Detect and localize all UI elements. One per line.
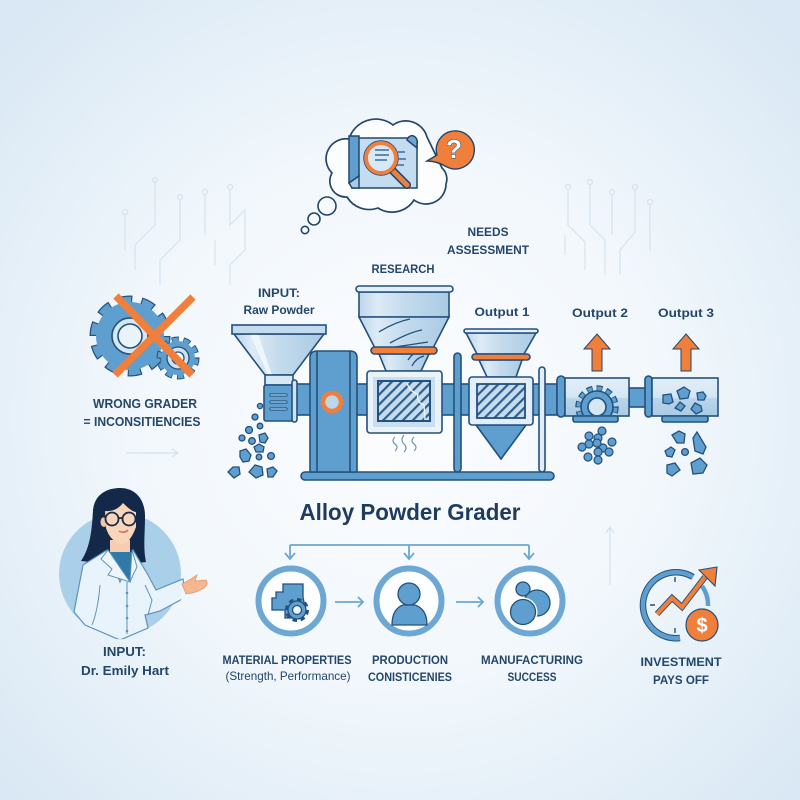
thought cloud with map and question xyxy=(301,119,474,234)
label: needs assessment: NEEDS xyxy=(468,225,508,239)
neck xyxy=(110,540,130,564)
label: material properties: (Strength, Performance) xyxy=(226,669,351,683)
label: manufacturing success: MANUFACTURING xyxy=(481,653,583,667)
pipe to final box xyxy=(629,388,646,407)
research hopper xyxy=(356,286,453,371)
decorative circuit traces right xyxy=(565,180,652,275)
icon: question bubble xyxy=(427,131,474,169)
icon: person xyxy=(392,583,427,625)
scientist portrait xyxy=(59,488,207,640)
buttons xyxy=(126,592,128,632)
label: wrong grader: = INCONSITIENCIES xyxy=(84,415,200,429)
face xyxy=(105,503,136,544)
post xyxy=(454,353,461,472)
arrow step 2 to 3 xyxy=(456,597,483,607)
orange ring xyxy=(323,393,341,411)
label: wrong grader xyxy=(84,397,200,429)
thought bubbles xyxy=(301,197,336,234)
hair xyxy=(81,488,146,565)
light post xyxy=(539,367,545,472)
label: output 1: Output 1 xyxy=(474,305,530,319)
label: investment pays off: PAYS OFF xyxy=(653,673,709,687)
small gear xyxy=(161,341,195,375)
mouth xyxy=(119,530,128,532)
output 1 chamber xyxy=(469,377,533,425)
growth arrow xyxy=(657,577,705,614)
investment icon xyxy=(643,567,718,641)
label: output 3: Output 3 xyxy=(658,306,714,320)
label: dr emily hart: Dr. Emily Hart xyxy=(81,664,170,678)
label: dr emily hart xyxy=(81,645,170,678)
output 3 collar xyxy=(645,376,652,417)
label: production consistencies: PRODUCTION xyxy=(372,653,448,667)
clock dial xyxy=(643,572,693,638)
label: wrong grader: WRONG GRADER xyxy=(93,397,197,411)
label: material properties: MATERIAL PROPERTIES xyxy=(222,653,352,667)
step 2 production xyxy=(376,568,442,634)
label: manufacturing success xyxy=(481,653,583,684)
coat xyxy=(74,550,186,640)
gear xyxy=(579,389,615,425)
raw powder particles xyxy=(228,403,277,478)
output 2 particle cluster xyxy=(578,427,616,464)
orange band xyxy=(371,347,437,354)
label: research: RESEARCH xyxy=(372,262,434,276)
orange arrow output 3 xyxy=(673,334,699,371)
label: needs assessment xyxy=(447,225,530,257)
collar xyxy=(101,550,137,582)
orange cross xyxy=(115,296,193,375)
ear xyxy=(100,517,108,527)
icon: question bubble: ? xyxy=(446,134,462,164)
label: dr emily hart: INPUT: xyxy=(103,645,146,659)
support column xyxy=(310,351,357,472)
main pipe xyxy=(295,384,557,415)
label: output 2: Output 2 xyxy=(572,306,628,320)
output 2 chamber xyxy=(565,378,629,425)
label: input raw powder: INPUT: xyxy=(258,286,300,300)
cloud xyxy=(326,119,447,212)
step 3 manufacturing xyxy=(498,568,562,634)
label: input raw powder: Raw Powder xyxy=(244,303,315,317)
output 3 particles xyxy=(665,431,707,476)
dollar coin xyxy=(686,609,718,641)
label: material properties xyxy=(222,653,352,683)
arrow step 1 to 2 xyxy=(335,597,363,607)
label: production consistencies xyxy=(368,653,452,684)
label: needs assessment: ASSESSMENT xyxy=(447,243,530,257)
wrong grader gears icon xyxy=(96,296,195,375)
output 1 cone xyxy=(476,425,526,459)
label: input raw powder xyxy=(244,286,315,317)
hand xyxy=(182,575,207,594)
title: Alloy Powder Grader xyxy=(300,499,521,525)
icon: map xyxy=(349,136,417,188)
label: investment pays off: INVESTMENT xyxy=(640,655,722,669)
base rail xyxy=(301,472,554,480)
icon: blocks and gear xyxy=(272,584,306,620)
input hopper xyxy=(232,325,326,422)
machine xyxy=(232,286,718,480)
blue shirt xyxy=(110,552,132,582)
label: production consistencies: CONISTICENIES xyxy=(368,670,452,684)
research chamber xyxy=(367,371,442,433)
output 3 chamber xyxy=(652,378,718,422)
portrait circle xyxy=(59,513,181,635)
faint connector arrow right xyxy=(606,527,614,585)
orange arrow output 2 xyxy=(584,334,610,371)
heat wisps xyxy=(393,435,416,452)
label: investment pays off xyxy=(640,655,722,687)
decorative circuit traces left xyxy=(122,178,245,285)
faint connector arrow left xyxy=(126,449,178,457)
bracket arrows xyxy=(285,545,534,559)
icon: spheres xyxy=(508,582,550,626)
icon: magnifier xyxy=(364,141,407,185)
investment icon: $ xyxy=(696,615,708,637)
output 1 hopper xyxy=(464,329,538,377)
step 1 material properties xyxy=(258,568,324,634)
large gear xyxy=(96,302,164,370)
glasses xyxy=(102,512,136,526)
label: manufacturing success: SUCCESS xyxy=(508,670,556,684)
output 2 collar xyxy=(557,376,565,417)
coat center line xyxy=(92,582,152,634)
